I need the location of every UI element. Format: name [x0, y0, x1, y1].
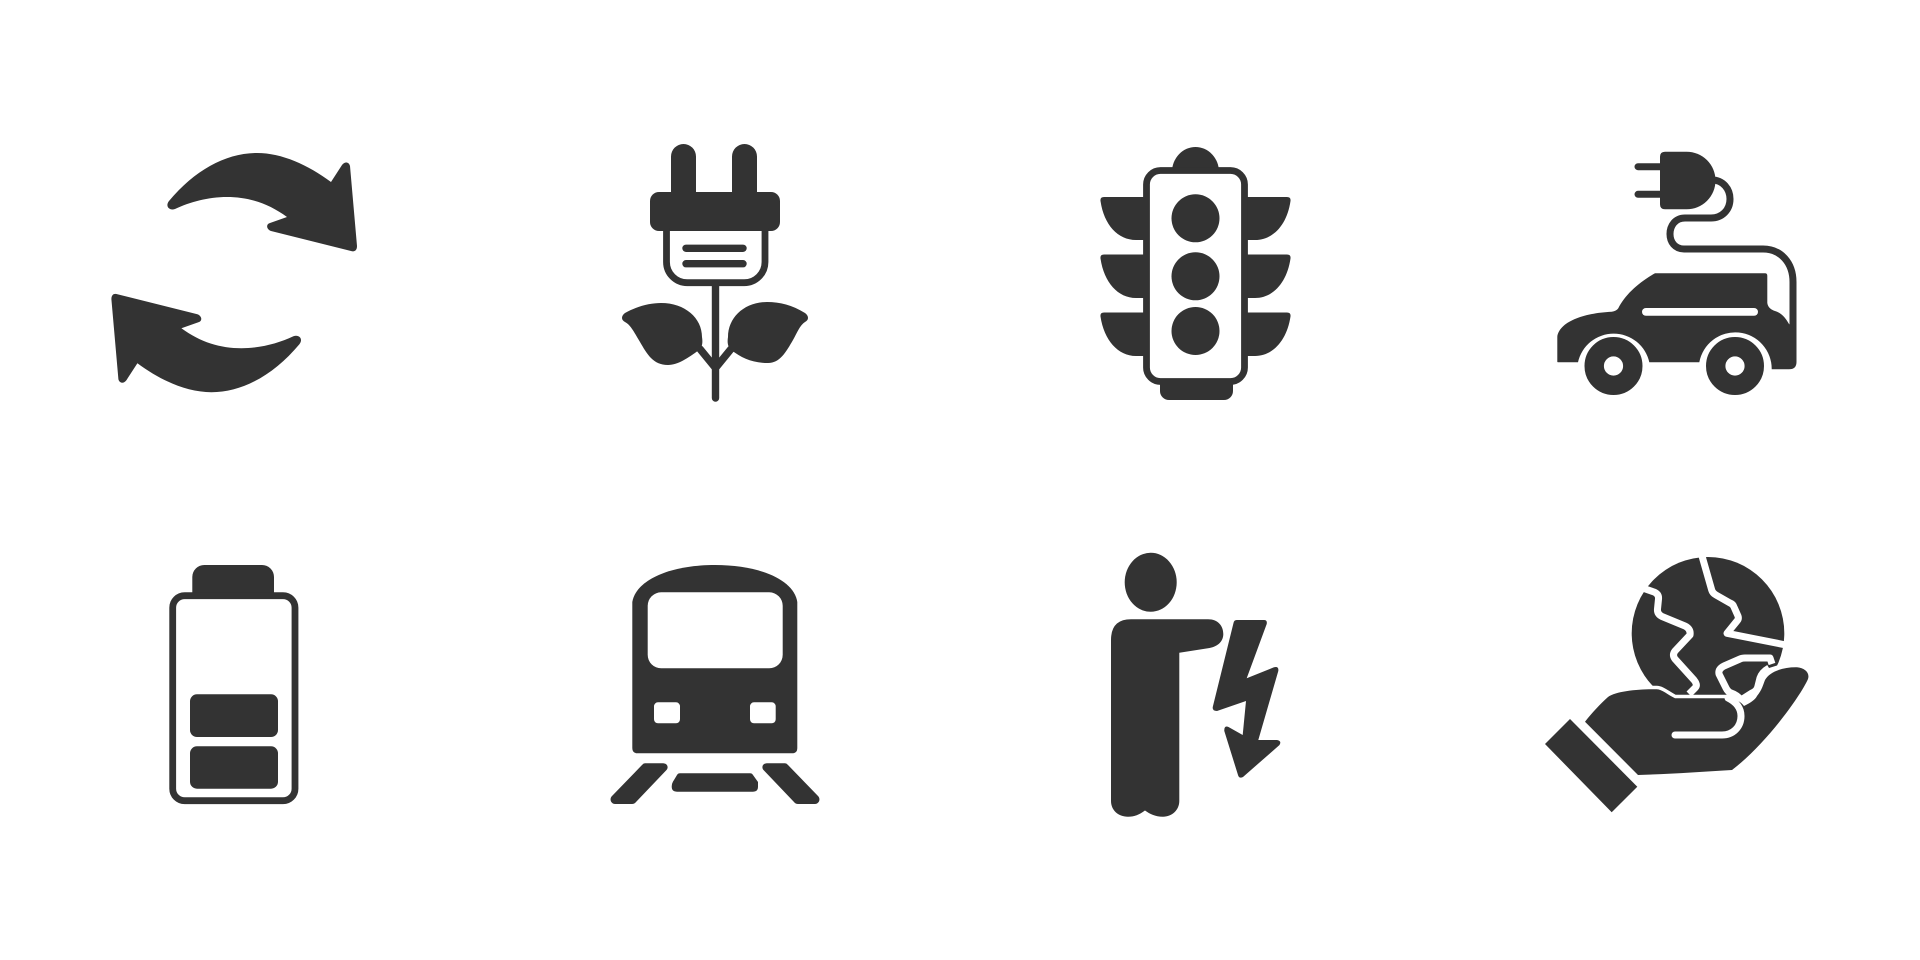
plug head bar [650, 192, 780, 231]
headlights [654, 702, 776, 723]
globe continent lines [1641, 555, 1786, 700]
sleeve cuff [1545, 719, 1637, 812]
leaf: left [622, 303, 702, 365]
lamps [1172, 194, 1220, 355]
track sleeper: centre [672, 773, 758, 792]
charge cell: lower [190, 746, 278, 789]
train body [632, 565, 797, 753]
globe [1632, 557, 1784, 710]
base [1160, 383, 1233, 400]
battery case [173, 596, 295, 801]
plug slots [686, 248, 743, 264]
plug prongs [671, 144, 757, 200]
charge cell: upper [190, 694, 278, 737]
housing [1146, 170, 1244, 382]
icon: traffic light [1100, 147, 1291, 400]
plug body outline [666, 228, 765, 283]
wings: left [1100, 197, 1145, 356]
battery cap [192, 565, 274, 596]
icon: globe in hand [1545, 555, 1810, 812]
car window strip [1642, 308, 1758, 316]
plug head [1660, 152, 1716, 209]
icon: train [611, 565, 819, 804]
car body [1557, 273, 1796, 369]
stem and branches [700, 284, 731, 398]
icon: person and lightning [1111, 553, 1280, 817]
icon: battery [173, 565, 295, 801]
arrow: top [167, 153, 357, 251]
rail: right [762, 763, 819, 804]
icon: electric car [1557, 152, 1796, 385]
arrow: bottom [111, 294, 301, 392]
plug prongs [1638, 167, 1662, 194]
hand [1585, 667, 1808, 775]
rail: left [611, 763, 668, 804]
person body [1111, 619, 1223, 817]
icon: recycle arrows [111, 153, 357, 392]
wings: right [1246, 197, 1291, 356]
finger line [1675, 698, 1741, 735]
lightning bolt [1213, 620, 1280, 778]
wheel: rear [1716, 347, 1754, 385]
icon: eco plug [622, 144, 808, 398]
person head [1125, 553, 1177, 612]
wheel: front [1594, 347, 1633, 385]
globe clip mask: right of island [1745, 650, 1810, 720]
cable [1670, 180, 1793, 335]
windscreen [648, 592, 783, 668]
top dome [1172, 147, 1219, 172]
leaf: right [728, 302, 808, 363]
